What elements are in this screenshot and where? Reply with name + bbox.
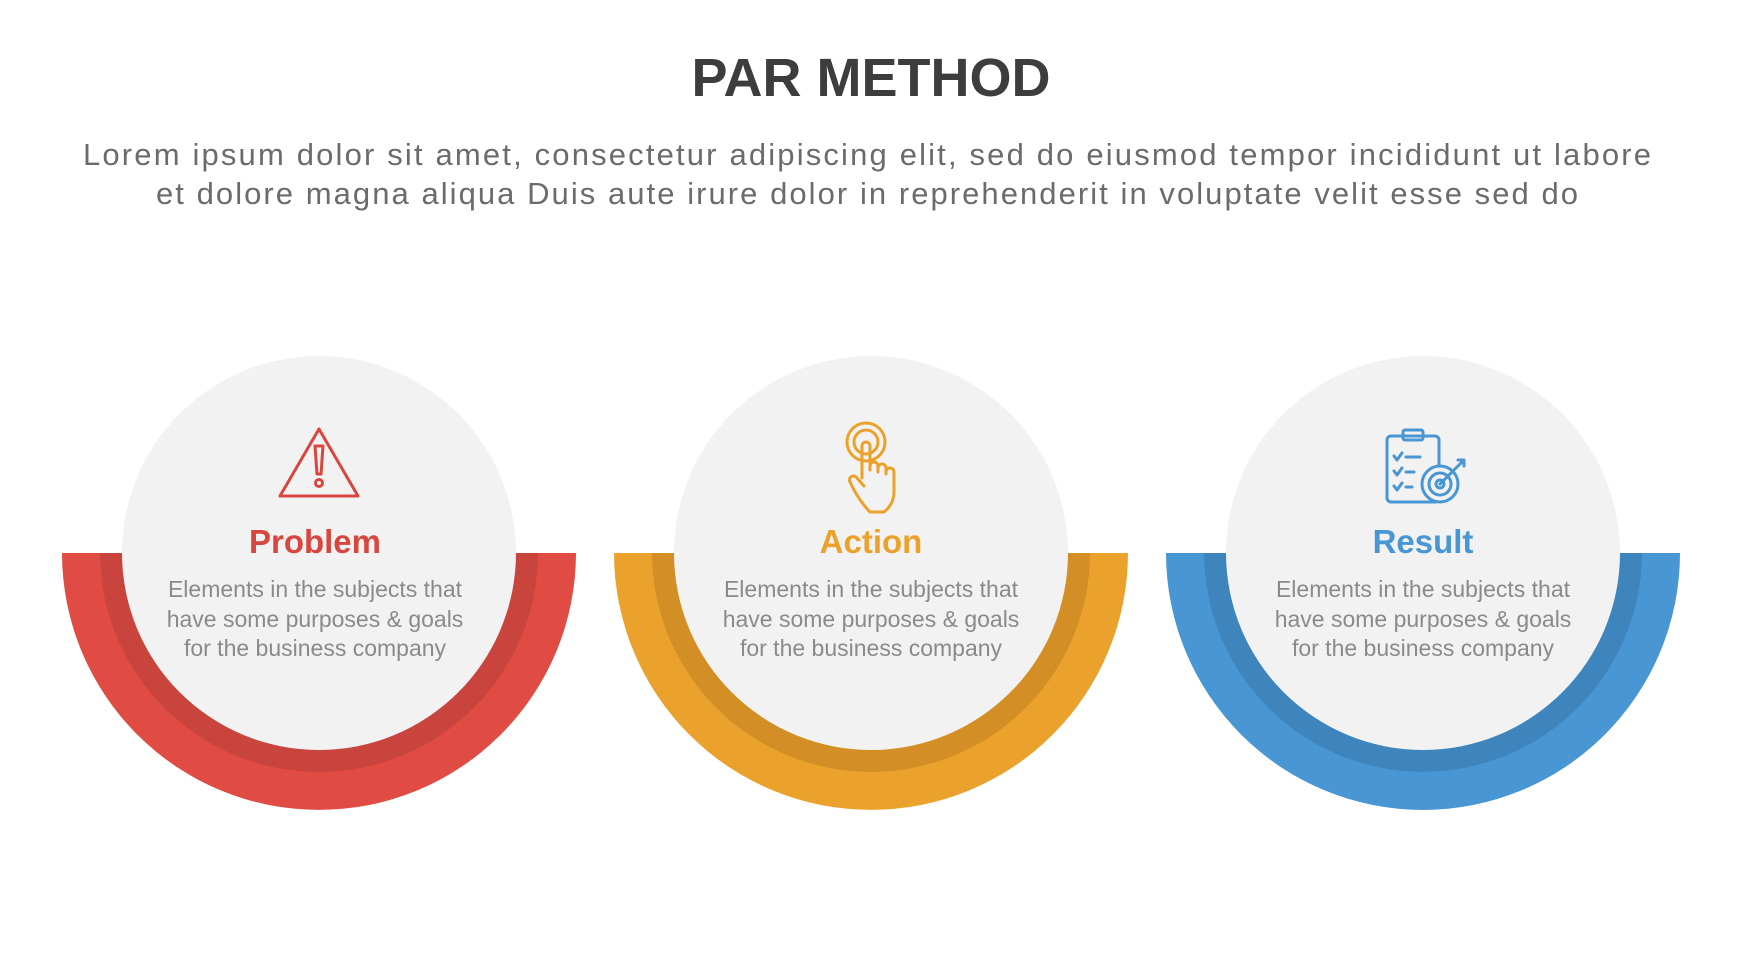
subtitle: et dolore magna aliqua Duis aute irure dolor in reprehenderit in voluptate velit esse sed do bbox=[156, 176, 1578, 211]
circle: result bbox=[1226, 356, 1620, 750]
text: action bbox=[723, 576, 1019, 661]
text: problem: Elements in the subjects that bbox=[168, 576, 463, 602]
circle: problem bbox=[122, 356, 516, 750]
panel: problem bbox=[62, 356, 576, 810]
text: result bbox=[1275, 576, 1571, 661]
icon: clipboard target bbox=[1387, 430, 1464, 502]
text: action: have some purposes & goals bbox=[723, 606, 1019, 632]
half ring: problem bbox=[62, 553, 576, 810]
text: result: have some purposes & goals bbox=[1275, 606, 1571, 632]
icon: pointing hand bbox=[847, 423, 894, 512]
half ring: result bbox=[1166, 553, 1680, 810]
half ring: action bbox=[614, 553, 1128, 810]
subtitle bbox=[83, 137, 1651, 211]
text: action: Elements in the subjects that bbox=[724, 576, 1019, 602]
subtitle: Lorem ipsum dolor sit amet, consectetur adipiscing elit, sed do eiusmod tempor incididunt ut labore bbox=[83, 137, 1651, 172]
panel: result bbox=[1166, 356, 1680, 810]
panel: action bbox=[614, 356, 1128, 810]
heading: action: Action bbox=[820, 523, 922, 560]
text: problem bbox=[167, 576, 463, 661]
heading: result: Result bbox=[1373, 523, 1473, 560]
text: result: Elements in the subjects that bbox=[1276, 576, 1571, 602]
text: problem: have some purposes & goals bbox=[167, 606, 463, 632]
text: action: for the business company bbox=[740, 635, 1003, 661]
icon: warning triangle bbox=[280, 429, 358, 496]
title: PAR METHOD bbox=[692, 48, 1050, 108]
heading: problem: Problem bbox=[249, 523, 381, 560]
text: problem: for the business company bbox=[184, 635, 447, 661]
text: result: for the business company bbox=[1292, 635, 1555, 661]
circle: action bbox=[674, 356, 1068, 750]
